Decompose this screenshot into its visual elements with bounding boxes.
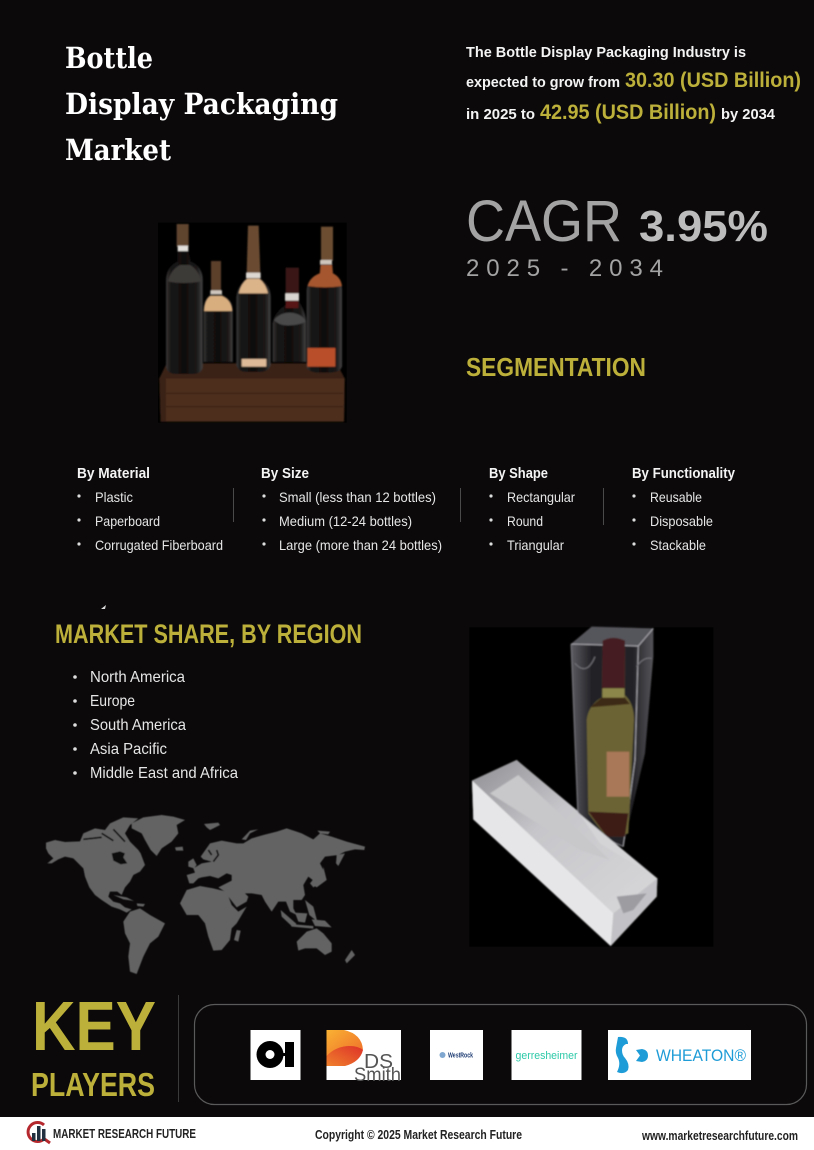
logo: Gerresheimer: gerresheimer [516,1050,578,1062]
region list [73,669,238,782]
world map [46,815,365,974]
bottle in box [587,638,634,837]
key players heading: PLAYERS [31,1066,155,1103]
region list: South America [90,717,186,734]
segment: by size [261,465,442,553]
logo: DS Smith: Smith [354,1065,401,1086]
title: Bottle [65,41,153,75]
key players heading: KEY [32,987,156,1065]
segment: by functionality: Disposable [650,513,713,529]
market growth summary [466,44,801,124]
region list: North America [90,669,185,686]
segment: by material: By Material [77,465,150,482]
segment: by shape: Round [507,513,543,529]
segment: by functionality: Reusable [650,489,702,505]
title: Market [65,133,172,167]
segment: by material: Plastic [95,489,133,505]
market growth summary: by 2034 [721,106,776,123]
key players panel [194,1004,806,1104]
segment: by functionality [632,465,736,553]
logo: Wheaton [608,1030,751,1080]
region list: Europe [90,693,135,710]
logo: DS Smith: DS [364,1051,393,1073]
market growth summary: 30.30 (USD Billion) [625,69,801,92]
segment: by material [77,465,223,553]
market growth summary: The Bottle Display Packaging Industry is [466,44,746,61]
wooden stand [159,363,345,422]
footer: MARKET RESEARCH FUTURE [53,1126,196,1141]
lying box [472,760,657,946]
title: Display Packaging [65,87,338,121]
segment: by functionality: Stackable [650,537,706,553]
logo: Gerresheimer [512,1030,582,1080]
footer logo [28,1122,50,1143]
bottle 4 [273,268,306,362]
image: bottles on wooden stand [158,223,347,423]
bottle 5 [307,227,342,373]
segment: by size: Medium (12-24 bottles) [279,513,412,529]
segmentation heading: SEGMENTATION [466,352,646,382]
region list: Asia Pacific [90,741,167,758]
bottle 2 [204,261,233,362]
segment: by material: Paperboard [95,513,160,529]
segment: by shape: Rectangular [507,489,575,505]
logo: Wheaton: WHEATON® [656,1046,746,1065]
image: clear packaging boxes with bottle [469,627,713,947]
upright box [571,627,653,847]
market share heading: MARKET SHARE, BY REGION [55,619,362,649]
CAGR figure: 2025 - 2034 [466,255,663,282]
segment: by size: Small (less than 12 bottles) [279,489,436,505]
bottle 1 [166,224,203,374]
segment: by shape [489,465,575,553]
segment: by shape: Triangular [507,537,564,553]
footer: Copyright © 2025 Market Research Future [315,1127,522,1142]
logo: WestRock: WestRock [448,1052,473,1060]
title [65,41,338,167]
logo: WestRock [430,1030,483,1080]
segment: by material: Corrugated Fiberboard [95,537,223,553]
segment: by functionality: By Functionality [632,465,736,482]
segment: by size: Large (more than 24 bottles) [279,537,442,553]
key players heading [31,987,156,1103]
CAGR figure: CAGR [466,189,622,254]
segment: by shape: By Shape [489,465,548,482]
logo: DS Smith [326,1030,401,1086]
footer [0,1117,814,1150]
region list: Middle East and Africa [90,765,238,782]
market growth summary: in 2025 to [466,106,535,123]
CAGR figure: 3.95% [639,202,768,251]
segment: by size: By Size [261,465,309,482]
logo: O-I [250,1030,300,1080]
CAGR figure [466,189,768,282]
market growth summary: expected to grow from [466,74,620,91]
market growth summary: 42.95 (USD Billion) [540,101,716,124]
bottle 3 [236,226,271,372]
